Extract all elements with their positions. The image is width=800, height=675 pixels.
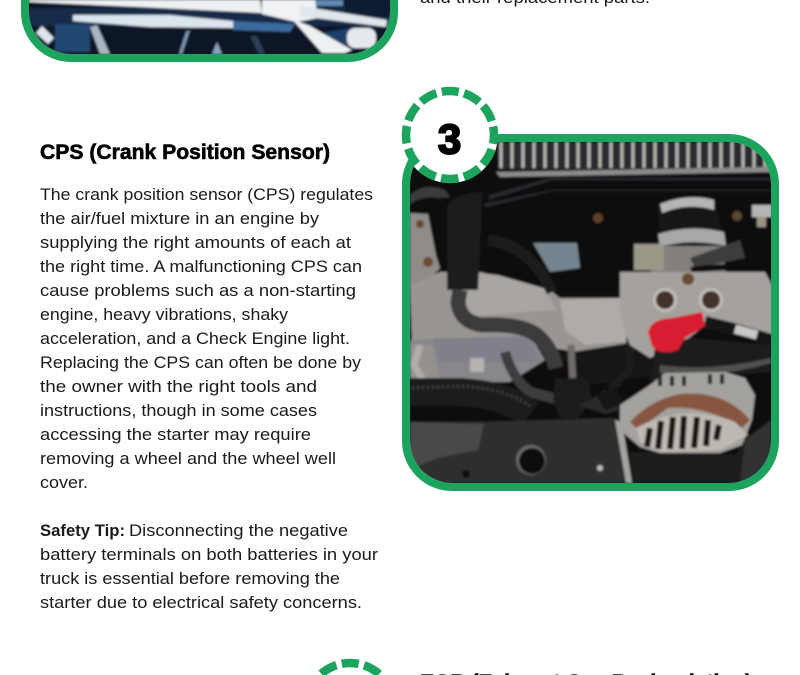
dark space behind engine bbox=[480, 235, 560, 295]
intake manifold bbox=[410, 272, 640, 355]
right lower panel bbox=[629, 446, 744, 483]
badge: number 3: 3 bbox=[438, 116, 461, 162]
text block: CPS description: cause problems such as a non-starting bbox=[40, 281, 356, 300]
small hose bbox=[505, 352, 560, 400]
photo: wrench tools, previous section bbox=[25, 0, 395, 60]
badge: number 3 bbox=[402, 87, 498, 183]
text block: safety tip: starter due to electrical safety concerns. bbox=[40, 593, 362, 612]
text block: CPS description: acceleration, and a Check Engine light. bbox=[40, 329, 350, 348]
text block: CPS description bbox=[40, 185, 373, 492]
corrugated cable bbox=[705, 322, 771, 340]
throttle boot bbox=[634, 197, 726, 272]
photo: engine bay bbox=[405, 138, 775, 488]
badge: next section number, cropped bbox=[302, 659, 398, 675]
lower dark panel bbox=[410, 418, 630, 483]
text block: CPS description: supplying the right amounts of each at bbox=[40, 233, 351, 252]
text block: safety tip: truck is essential before removing the bbox=[40, 569, 340, 588]
text block: CPS description: cover. bbox=[40, 473, 88, 492]
text block: safety tip: battery terminals on both batteries in your bbox=[40, 545, 378, 564]
text block: CPS description: The crank position sensor (CPS) regulates bbox=[40, 185, 373, 204]
dark area under manifold bbox=[560, 340, 655, 385]
photo frame: wrench tools bbox=[25, 0, 394, 58]
text block: CPS description: engine, heavy vibrations, shaky bbox=[40, 305, 289, 324]
dark pipe at left bbox=[447, 192, 482, 290]
dark band under red boot bbox=[650, 338, 771, 380]
fitting bbox=[553, 378, 592, 418]
text block: CPS description: the right time. A malfunctioning CPS can bbox=[40, 257, 362, 276]
text block: safety tip bbox=[40, 521, 378, 612]
text block: safety tip: Safety Tip: bbox=[40, 521, 125, 540]
text block: CPS description: the owner with the right tools and bbox=[40, 377, 317, 396]
throttle body bbox=[620, 272, 772, 358]
text block: CPS description: Replacing the CPS can often be done by bbox=[40, 353, 362, 372]
corrugated hose bbox=[410, 392, 530, 414]
text block: CPS description: the air/fuel mixture in an engine by bbox=[40, 209, 320, 228]
heading: CPS (Crank Position Sensor): CPS (Crank Position Sensor) bbox=[40, 140, 330, 164]
text block: CPS description: instructions, though in some cases bbox=[40, 401, 317, 420]
right bolt bbox=[752, 205, 772, 217]
text block: safety tip: Disconnecting the negative bbox=[129, 521, 348, 540]
manifold lower section bbox=[410, 335, 545, 382]
black hose bbox=[458, 290, 556, 368]
upper silver pipe bbox=[410, 344, 426, 380]
intercooler fins bbox=[484, 142, 773, 207]
text block: CPS description: accessing the starter may require bbox=[40, 425, 311, 444]
alternator bbox=[620, 372, 755, 453]
text block: CPS description: removing a wheel and the wheel well bbox=[40, 449, 336, 468]
red boot bbox=[648, 312, 705, 352]
left bracket bbox=[410, 213, 440, 285]
connector and cable bbox=[690, 240, 745, 268]
photo frame: engine bay bbox=[406, 138, 775, 487]
